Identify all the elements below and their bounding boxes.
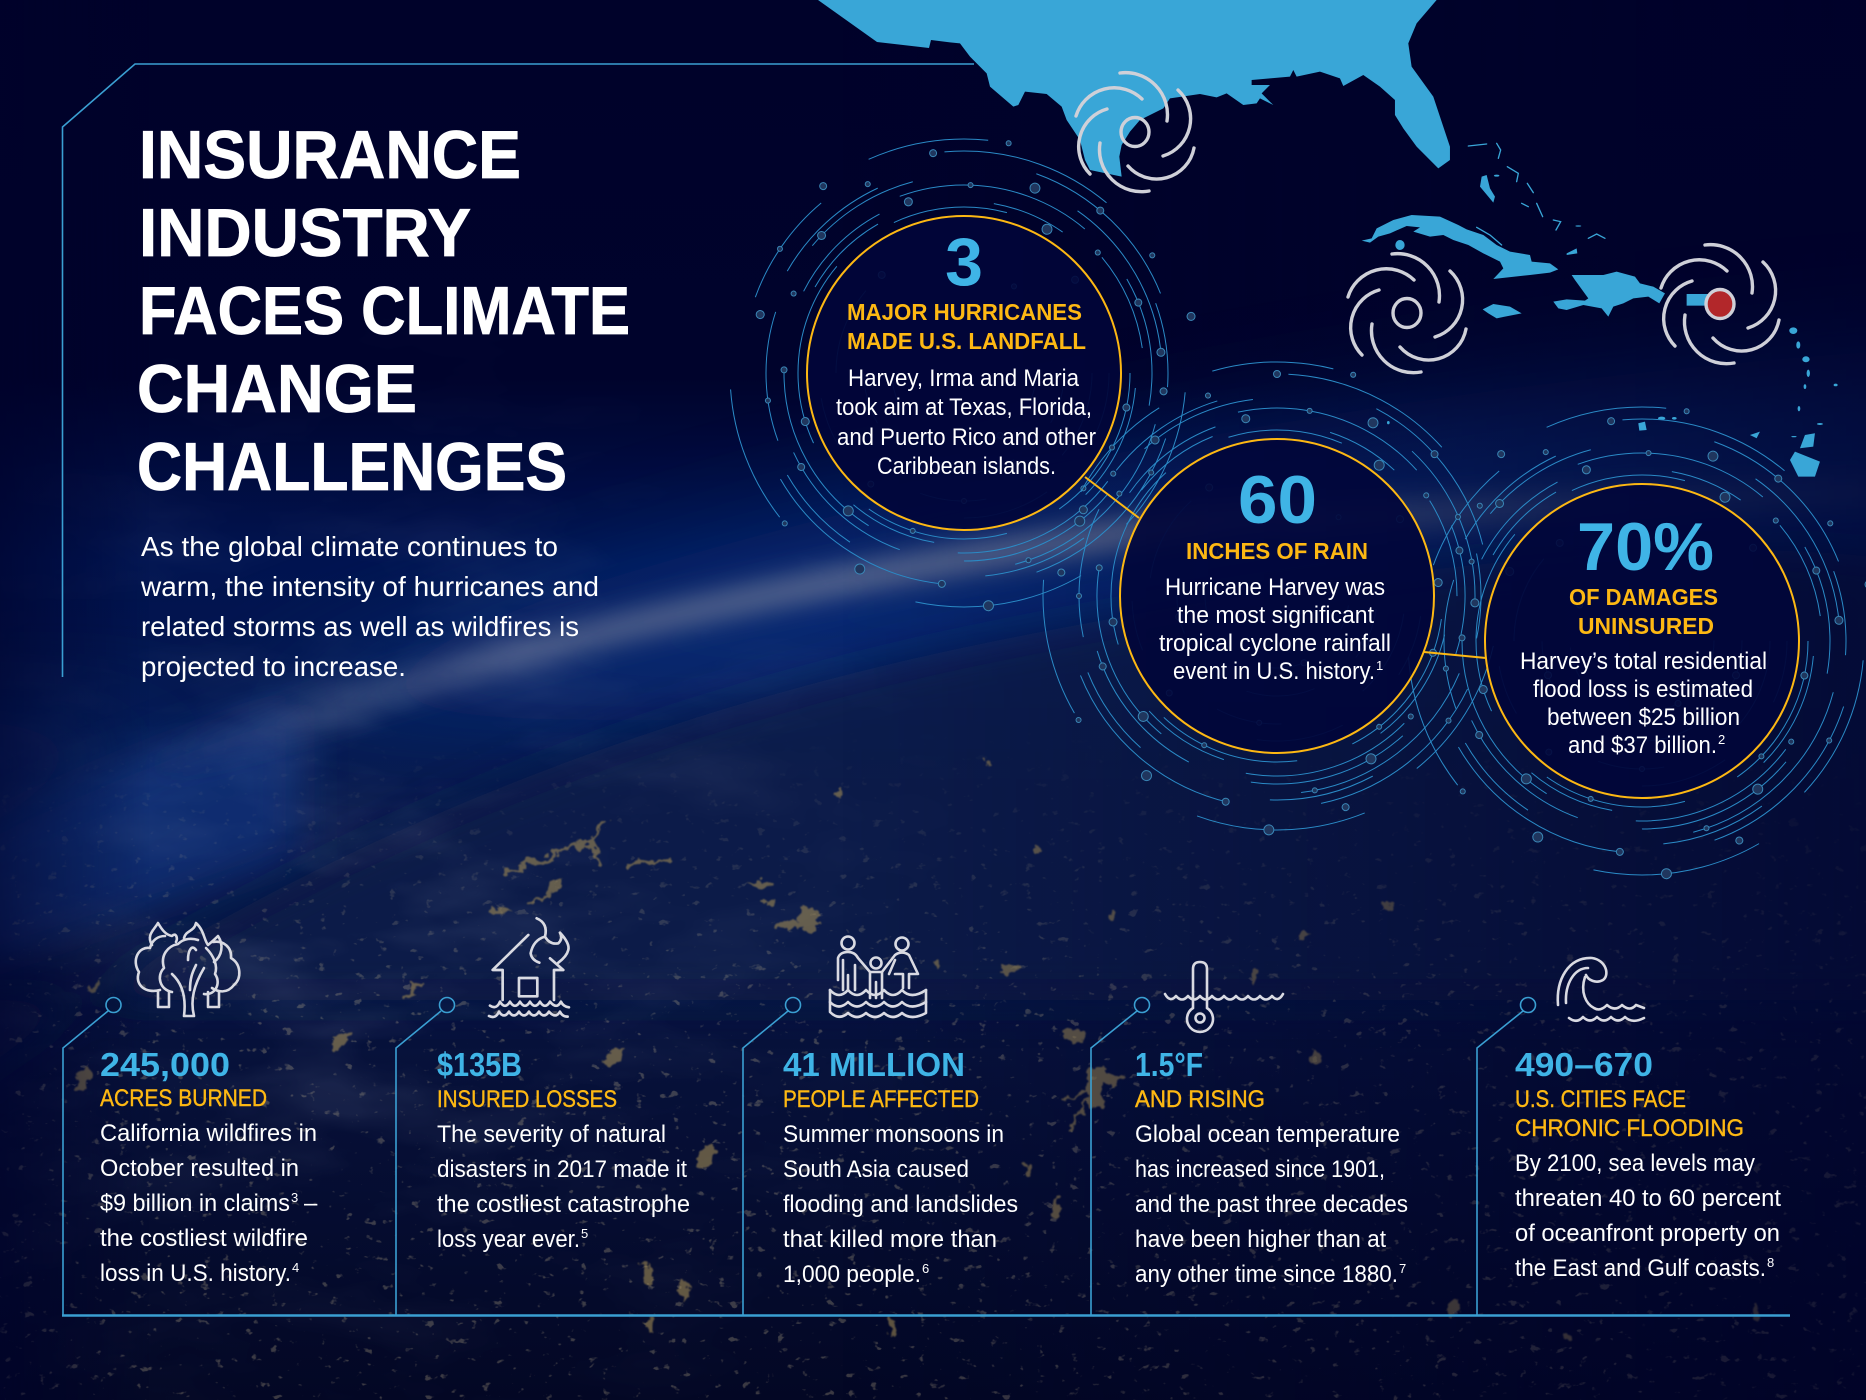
stat column: ocean temperature: any other time since 1880. (1135, 1261, 1398, 1288)
hurricane icon: Florida (1348, 254, 1466, 373)
stat column: ocean temperature: 1.5°F (1135, 1046, 1203, 1083)
stat circle: 70% of damages uninsured: and $37 billion. (1568, 732, 1717, 759)
icon: family in flood water (830, 936, 926, 1017)
hurricane icon: Texas (1076, 73, 1194, 192)
title frame line (62, 64, 974, 677)
icon: thermometer in water (1165, 962, 1283, 1032)
stat column: ocean temperature: AND RISING (1135, 1086, 1265, 1113)
bottom frame (62, 998, 1790, 1316)
stat circle: 3 major hurricanes: Harvey, Irma and Maria (848, 365, 1080, 392)
stat circle: 70% of damages uninsured: flood loss is estimated (1533, 676, 1753, 703)
stat circle: 70% of damages uninsured (1485, 484, 1799, 798)
stat circle: 70% of damages uninsured: between $25 billion (1547, 704, 1740, 731)
title: FACES CLIMATE (139, 273, 630, 349)
icon: big wave (1558, 958, 1644, 1021)
title: CHALLENGES (137, 429, 567, 505)
stat column: people affected: 41 MILLION (783, 1046, 965, 1083)
stat circle: 60 inches of rain: tropical cyclone rainfall (1159, 630, 1391, 657)
stat circle: 3 major hurricanes: took aim at Texas, Florida, (836, 394, 1092, 421)
stat column: insured losses: the costliest catastrophe (437, 1191, 690, 1218)
stat column: insured losses: disasters in 2017 made it (437, 1156, 687, 1183)
stat column: acres burned: the costliest wildfire (100, 1225, 308, 1252)
icon: burning trees (136, 923, 239, 1016)
intro text (140, 531, 599, 682)
stat circle: 3 major hurricanes: 3 (945, 224, 983, 300)
stat circle: 3 major hurricanes: and Puerto Rico and other (837, 424, 1096, 451)
stat column: acres burned: 3 (291, 1190, 298, 1205)
stat column: insured losses: 5 (581, 1226, 588, 1241)
stat column: people affected: South Asia caused (783, 1156, 969, 1183)
stat column: people affected: that killed more than (783, 1226, 997, 1253)
stat column: people affected: 1,000 people. (783, 1261, 921, 1288)
stat column: insured losses: loss year ever. (437, 1226, 580, 1253)
intro text: related storms as well as wildfires is (141, 611, 579, 642)
stat circle: 60 inches of rain (1120, 439, 1434, 753)
stat column: ocean temperature: has increased since 1901, (1135, 1156, 1385, 1183)
stat column: people affected: Summer monsoons in (783, 1121, 1004, 1148)
intro text: projected to increase. (141, 651, 406, 682)
stat column: acres burned: loss in U.S. history. (100, 1260, 291, 1287)
stat column: ocean temperature: 7 (1399, 1261, 1406, 1276)
connector lines between circles (1085, 477, 1486, 658)
stat column: ocean temperature: have been higher than at (1135, 1226, 1386, 1253)
stat column: chronic flooding: CHRONIC FLOODING (1515, 1115, 1744, 1142)
hurricane icon: Puerto Rico (1661, 245, 1779, 364)
stat circle: 60 inches of rain: 60 (1238, 462, 1317, 538)
stat column: acres burned: California wildfires in (100, 1120, 317, 1147)
stat column: insured losses: INSURED LOSSES (437, 1086, 617, 1113)
stat circle: 60 inches of rain: Hurricane Harvey was (1165, 574, 1385, 601)
icon: house on fire in flood (489, 918, 569, 1017)
stat column: chronic flooding: the East and Gulf coasts. (1515, 1255, 1766, 1282)
stat column: acres burned: October resulted in (100, 1155, 299, 1182)
map: United States mainland (818, 0, 1450, 177)
stat column: chronic flooding: U.S. CITIES FACE (1515, 1086, 1686, 1113)
stat column: chronic flooding: 490–670 (1515, 1046, 1653, 1083)
map: Caribbean islands (1362, 143, 1838, 477)
stat column: chronic flooding: 8 (1767, 1255, 1774, 1270)
intro text: As the global climate continues to (141, 531, 558, 562)
title: INDUSTRY (139, 195, 471, 271)
stat column: insured losses (437, 1046, 690, 1253)
stat circle: 60 inches of rain: 1 (1376, 658, 1383, 673)
stat column: chronic flooding: of oceanfront property on (1515, 1220, 1780, 1247)
stat circle: 70% of damages uninsured: 2 (1718, 732, 1725, 747)
title: INSURANCE (139, 117, 521, 193)
stat column: ocean temperature (1135, 1046, 1408, 1288)
stat column: ocean temperature: and the past three decades (1135, 1191, 1408, 1218)
stat column: chronic flooding (1515, 1046, 1781, 1282)
stat circle: 3 major hurricanes: MADE U.S. LANDFALL (847, 328, 1086, 354)
stat circle: 70% of damages uninsured: 70% (1577, 509, 1714, 585)
stat column: people affected: PEOPLE AFFECTED (783, 1086, 979, 1113)
stat circle: 60 inches of rain: event in U.S. history. (1173, 658, 1375, 685)
stat circle: 60 inches of rain: INCHES OF RAIN (1186, 538, 1368, 564)
stat column: insured losses: The severity of natural (437, 1121, 666, 1148)
intro text: warm, the intensity of hurricanes and (140, 571, 599, 602)
stat column: acres burned: – (304, 1190, 318, 1217)
stat column: people affected: flooding and landslides (783, 1191, 1018, 1218)
stat column: people affected (783, 1046, 1018, 1288)
stat column: acres burned: ACRES BURNED (100, 1085, 267, 1112)
stat column: chronic flooding: By 2100, sea levels may (1515, 1150, 1755, 1177)
stat circle: 70% of damages uninsured: UNINSURED (1578, 613, 1714, 639)
stat column: people affected: 6 (922, 1261, 929, 1276)
title (137, 117, 630, 505)
stat column: acres burned: 245,000 (100, 1046, 230, 1083)
stat circle: 3 major hurricanes: MAJOR HURRICANES (847, 299, 1082, 325)
stat circle: 3 major hurricanes: Caribbean islands. (877, 453, 1056, 480)
stat circle: 3 major hurricanes (807, 216, 1121, 530)
title: CHANGE (137, 351, 417, 427)
stat circle: 60 inches of rain: the most significant (1177, 602, 1374, 629)
stat column: acres burned: 4 (292, 1260, 299, 1275)
stat column: acres burned (100, 1046, 318, 1287)
stat circle: 70% of damages uninsured: Harvey’s total residential (1520, 648, 1767, 675)
stat column: chronic flooding: threaten 40 to 60 percent (1515, 1185, 1781, 1212)
stat circle: 70% of damages uninsured: OF DAMAGES (1569, 584, 1718, 610)
stat column: ocean temperature: Global ocean temperature (1135, 1121, 1400, 1148)
stat column: acres burned: $9 billion in claims (100, 1190, 290, 1217)
stat column: insured losses: $135B (437, 1046, 522, 1083)
